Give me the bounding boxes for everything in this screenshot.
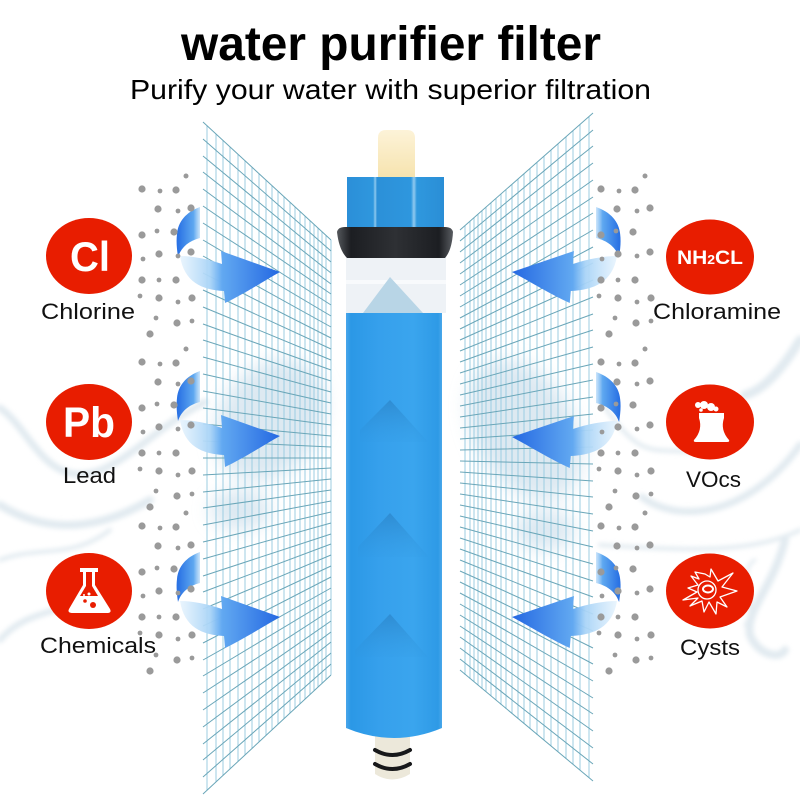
white band with triangle	[346, 256, 446, 313]
label: lead: Lead	[63, 463, 116, 488]
label: chemicals: Chemicals	[40, 633, 156, 658]
badge: lead: Pb	[63, 399, 115, 447]
contaminant particles: right bottom	[597, 510, 655, 675]
lower blue body	[346, 310, 442, 738]
arrow: chloramine	[512, 207, 621, 303]
icon: cooling tower	[694, 401, 729, 442]
label: chlorine: Chlorine	[41, 299, 135, 324]
embossed arrow 2	[358, 513, 429, 557]
label: cysts: Cysts	[680, 635, 740, 660]
contaminant particles: left middle	[138, 346, 196, 511]
icon: cyst cell	[683, 569, 737, 614]
badge: vocs	[666, 384, 754, 460]
label: chloramine: Chloramine	[653, 299, 781, 324]
water filter cartridge	[337, 130, 453, 780]
icon: flask	[68, 568, 111, 613]
badge: lead	[46, 384, 132, 460]
badge: chemicals	[46, 553, 132, 629]
badge: chloramine	[666, 220, 754, 294]
embossed arrow 1	[360, 400, 428, 442]
arrow: chlorine	[177, 207, 280, 303]
right filter mesh	[460, 113, 593, 781]
label: vocs: VOcs	[686, 467, 741, 492]
badge: chlorine: Cl	[70, 233, 110, 280]
contaminant particles: right top	[597, 174, 655, 338]
bottom fitting	[375, 730, 410, 780]
pale water patches behind mesh	[192, 338, 606, 550]
arrow: lead	[177, 371, 280, 467]
badge: cysts	[666, 554, 754, 628]
arrow: chemicals	[177, 552, 280, 648]
arrow: vocs	[512, 372, 621, 468]
left filter mesh	[203, 122, 331, 794]
embossed arrow 3	[355, 614, 428, 657]
badge: chlorine	[46, 218, 132, 294]
arrow: cysts	[512, 552, 621, 648]
black collar	[337, 227, 453, 258]
background water splash	[0, 340, 800, 655]
contaminant particles: left bottom	[138, 510, 196, 675]
subtitle: Purify your water with superior filtration	[130, 74, 651, 105]
upper blue body	[347, 177, 444, 232]
title: water purifier filter	[180, 18, 601, 71]
contaminant particles: left top	[138, 174, 196, 338]
cream top tube	[378, 130, 415, 178]
badge: chloramine: NH2CL	[677, 247, 743, 269]
contaminant particles: right middle	[597, 346, 655, 511]
